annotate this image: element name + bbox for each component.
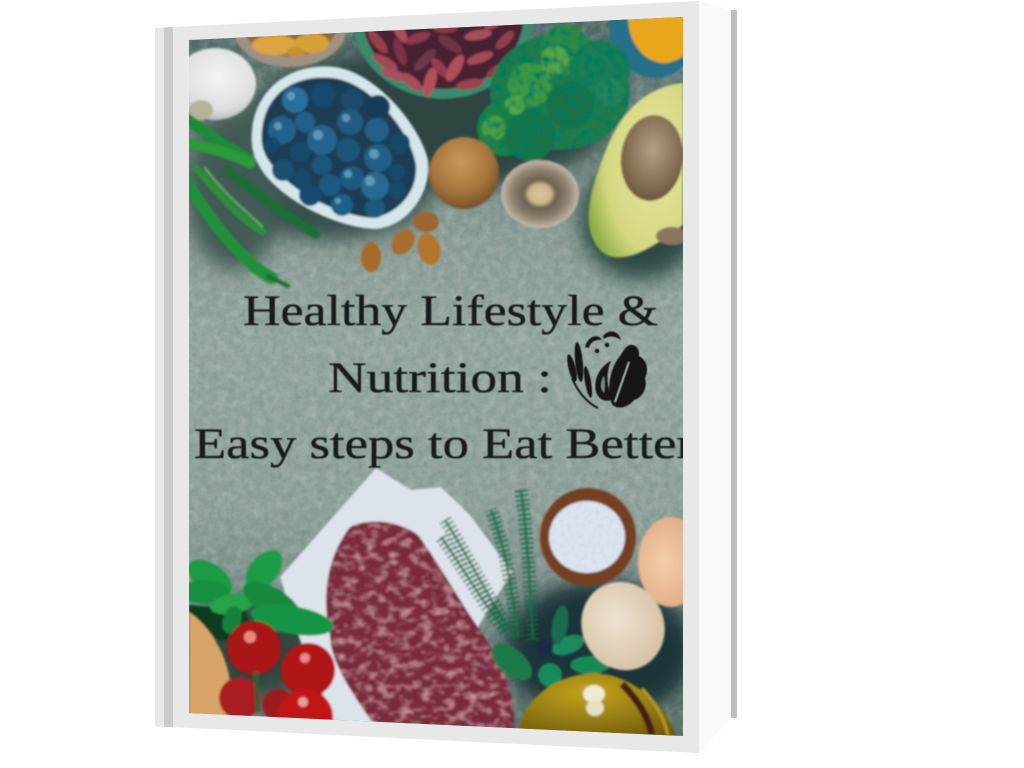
salt bowl (540, 488, 636, 586)
white mushroom (501, 160, 579, 228)
turmeric bowl (608, 17, 683, 80)
almonds (361, 212, 444, 272)
book mockup (155, 1, 737, 753)
title text: Healthy Lifestyle & (243, 288, 658, 335)
title text: Easy steps to Eat Better (194, 421, 694, 468)
title text: Nutrition : (328, 355, 552, 402)
avocado (589, 83, 688, 257)
title text (194, 288, 694, 468)
cover photo (189, 17, 683, 736)
green beans (180, 114, 316, 286)
eggs (580, 516, 683, 672)
book front cover frame (173, 1, 699, 753)
beans bowl (352, 0, 534, 99)
icon: leaves and mushrooms (565, 331, 647, 408)
book spine strips (155, 27, 173, 727)
book page block (699, 1, 737, 753)
raw steak (326, 522, 514, 730)
basil leaves (189, 548, 335, 641)
broccoli (477, 25, 630, 161)
onion slice (189, 612, 232, 716)
garlic bulb (189, 46, 258, 122)
concrete background (189, 17, 683, 737)
parchment paper (280, 468, 512, 724)
food shadows (180, 50, 700, 720)
nuts bowl (234, 32, 347, 68)
dark herb leaves (485, 604, 610, 687)
blueberry bowl (252, 66, 428, 229)
rosemary sprigs (441, 490, 533, 640)
olive oil bottle (518, 673, 676, 737)
cherry tomatoes (218, 619, 336, 720)
brown mushroom (429, 137, 499, 209)
